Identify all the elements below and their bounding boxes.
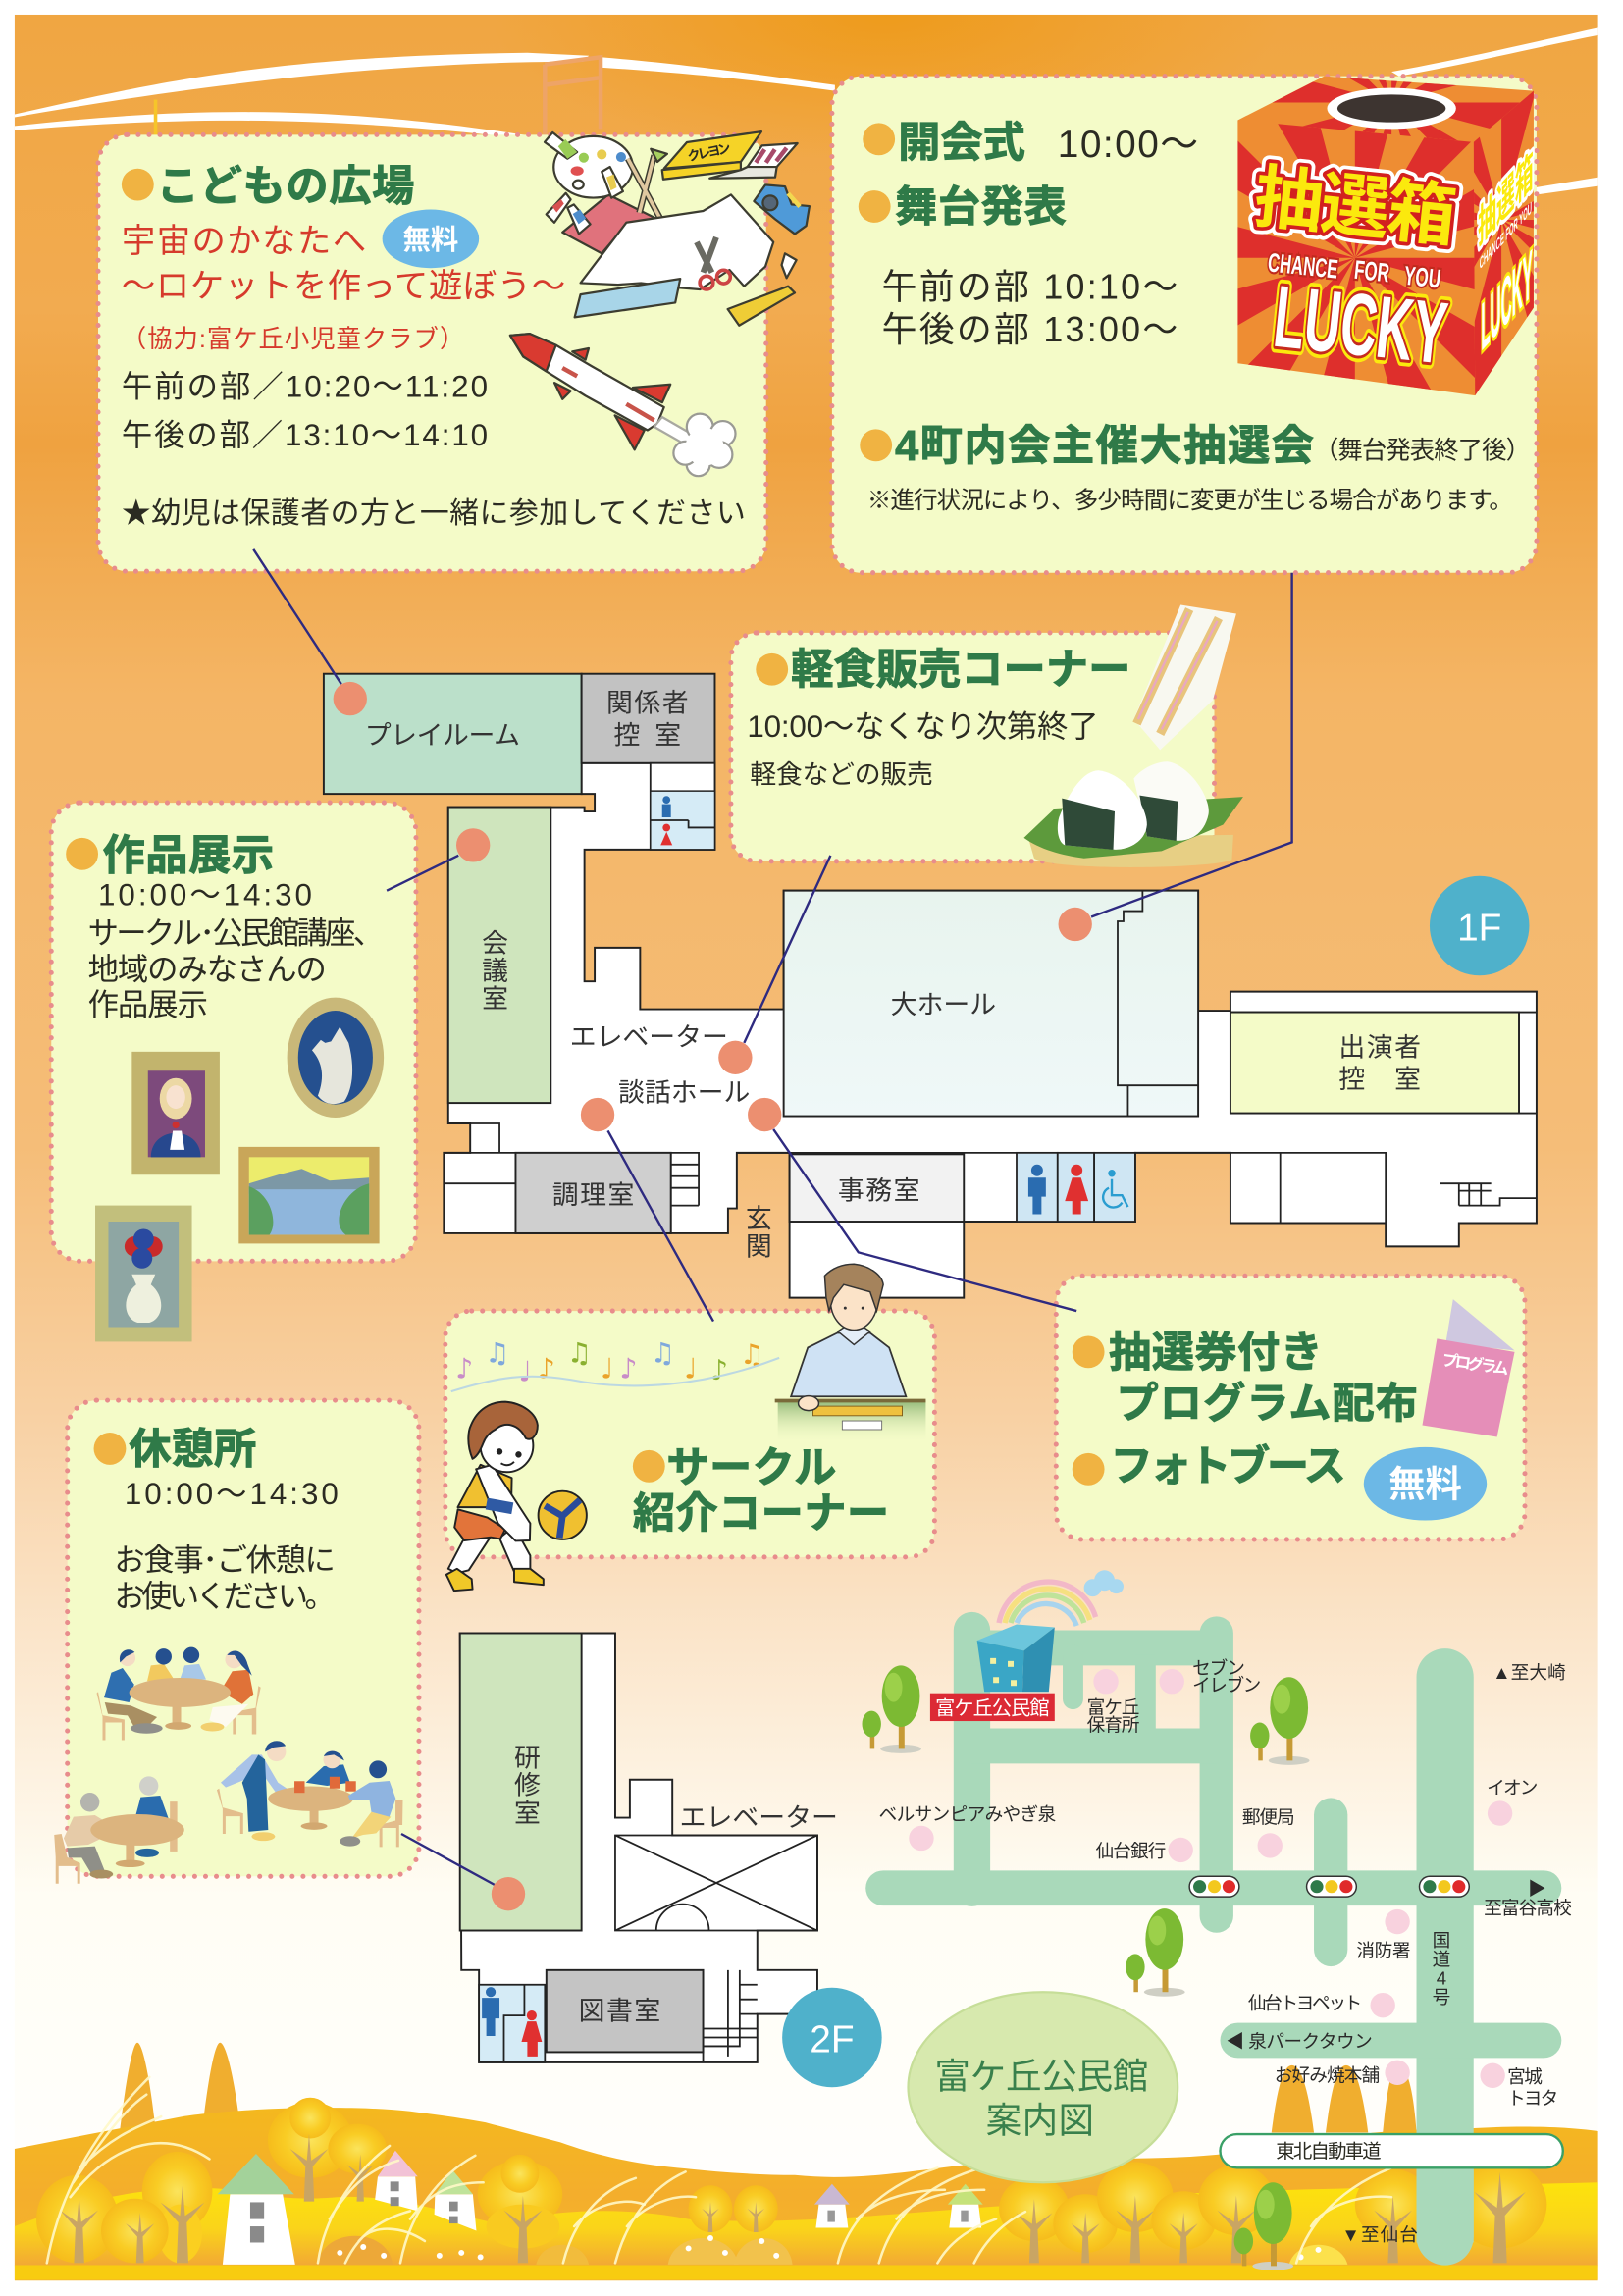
map labels: 仙台トヨペット — [1248, 1993, 1362, 2013]
panel: 抽選券付きプログラム配布・フォトブース — [1056, 1276, 1525, 1539]
music notes: ♩ — [518, 1356, 532, 1388]
map labels: 国 — [1433, 1930, 1450, 1951]
map labels: 4 — [1437, 1968, 1446, 1989]
panel: 開会式・舞台発表・抽選会 — [829, 74, 1539, 575]
room: 研修室: 室 — [514, 1799, 541, 1828]
lottery box: 抽選箱 — [1251, 157, 1460, 255]
room: 事務室 — [790, 1154, 964, 1222]
bullet — [863, 123, 895, 155]
restrooms 2F — [479, 1985, 545, 2062]
hours: 10:00～なくなり次第終了 — [747, 709, 1099, 744]
icon: craft supplies: クレヨン — [686, 140, 732, 164]
artwork: cat in oval frame — [288, 998, 384, 1118]
cooperation note: （協力:富ケ丘小児童クラブ） — [122, 326, 464, 353]
expressway: 東北自動車道: 東北自動車道 — [1276, 2141, 1382, 2163]
1F floor plan — [324, 674, 1537, 1298]
artwork: lake landscape — [238, 1147, 380, 1243]
badge: 無料 — [383, 210, 479, 268]
room: 図書室 — [547, 1970, 704, 2052]
room: 関係者控室: 控 室 — [613, 720, 681, 750]
bullet — [1073, 1453, 1105, 1486]
heading: 軽食販売コーナー: 軽食販売コーナー — [791, 647, 1130, 694]
description: 地域のみなさんの — [88, 953, 327, 987]
bullet — [122, 169, 154, 201]
pampas grass — [47, 2077, 1391, 2263]
restrooms main — [1017, 1153, 1135, 1222]
trees — [863, 1665, 1310, 2270]
illustration: people at table, top — [97, 1647, 261, 1740]
icon: program booklet — [1422, 1299, 1515, 1436]
icon: program booklet: プログラム — [1440, 1350, 1510, 1379]
lottery box: FOR — [1353, 255, 1390, 287]
room: 事務室: 事務室 — [838, 1176, 919, 1206]
room: 関係者控室: 関係者 — [606, 689, 689, 718]
heading: プログラム配布: プログラム配布 — [1116, 1381, 1418, 1428]
music notes: ♫ — [485, 1336, 510, 1369]
2F floor plan — [460, 1633, 882, 2087]
building outline 1F — [444, 763, 1537, 1298]
map labels: イオン — [1487, 1778, 1538, 1799]
afternoon stage time: 午後の部 13:00～ — [882, 310, 1178, 349]
map labels: 道 — [1433, 1949, 1450, 1969]
panel: 軽食販売コーナー — [731, 605, 1243, 867]
opening time: 10:00～ — [1058, 124, 1198, 166]
label: エレベーター: エレベーター — [570, 1022, 728, 1052]
badge: 1F — [1430, 876, 1529, 975]
music notes: ♪ — [710, 1354, 728, 1386]
room: 調理室: 調理室 — [552, 1180, 634, 1210]
room: プレイルーム — [324, 674, 582, 794]
label: エレベーター: エレベーター — [680, 1803, 838, 1833]
label: 玄関: 関 — [746, 1231, 772, 1261]
description: お使いください。 — [114, 1580, 336, 1614]
room: 図書室: 図書室 — [579, 1997, 660, 2026]
panel: サークル紹介コーナー — [445, 1264, 934, 1591]
music notes: ♪ — [538, 1353, 555, 1385]
corridor lines and small rooms — [444, 1123, 1537, 1233]
illustration: people at table, right — [217, 1741, 403, 1847]
heading: こどもの広場: こどもの広場 — [157, 164, 414, 211]
flower mounds — [318, 2235, 1347, 2265]
void with X — [615, 1835, 817, 1931]
artwork: vase of roses — [95, 1206, 192, 1341]
music notes: ♩ — [601, 1353, 613, 1385]
description: 作品展示 — [88, 988, 208, 1022]
heading: 抽選券付き: 抽選券付き — [1109, 1330, 1323, 1377]
map labels: ◀ 泉パークタウン — [1226, 2031, 1373, 2052]
room: 出演者控室: 控 室 — [1338, 1065, 1421, 1094]
bullet — [633, 1450, 665, 1483]
road segment below expressway — [1417, 2169, 1474, 2242]
badge: 無料 — [1364, 1447, 1487, 1521]
label: 富ケ丘公民館: 富ケ丘公民館 — [935, 1696, 1050, 1719]
landmark dots — [909, 1669, 1512, 2088]
icon: rainbow — [999, 1582, 1096, 1626]
map labels: トヨタ — [1507, 2088, 1558, 2109]
panel: こどもの広場 — [98, 131, 810, 571]
map labels: ベルサンピアみやぎ泉 — [879, 1804, 1057, 1825]
room: 出演者控室: 出演者 — [1338, 1032, 1421, 1062]
title oval: 富ケ丘公民館 案内図: 案内図 — [986, 2101, 1094, 2141]
heading: 休憩所: 休憩所 — [129, 1426, 256, 1473]
room: 出演者控室 — [1230, 1013, 1537, 1114]
bullet — [94, 1433, 126, 1465]
room: 調理室 — [515, 1153, 671, 1233]
landscape — [15, 2043, 1598, 2280]
room: 会議室: 会 — [482, 928, 508, 958]
music notes: ♩ — [684, 1353, 698, 1385]
map labels: ▶ — [1528, 1879, 1546, 1900]
room: 関係者控室 — [582, 674, 714, 763]
icon: sandwich — [1133, 605, 1236, 750]
room: 大ホール: 大ホール — [891, 990, 996, 1019]
badge: 2F: 2F — [810, 2018, 855, 2061]
description: お食事･ご休憩に — [114, 1542, 336, 1577]
room: 会議室 — [448, 808, 550, 1103]
map labels: お好み焼本舗 — [1275, 2064, 1380, 2085]
access map — [863, 1570, 1572, 2270]
illustration: man playing mahjong — [775, 1264, 925, 1441]
lottery box: LUCKY — [1481, 235, 1533, 367]
room: 大ホール — [784, 891, 1198, 1117]
map labels: 号 — [1433, 1987, 1450, 2008]
subtitle: ロケットを作って遊ぼう: ～ロケットを作って遊ぼう～ — [122, 268, 565, 305]
room: プレイルーム: プレイルーム — [365, 720, 520, 750]
room: 研修室 — [460, 1633, 582, 1931]
expressway: 東北自動車道 — [1220, 2134, 1563, 2167]
bullet — [66, 838, 98, 870]
heading: フォトブース: フォトブース — [1111, 1443, 1346, 1490]
badge: 無料: 無料 — [403, 225, 458, 256]
map labels: 仙台銀行 — [1096, 1841, 1166, 1861]
illustration: child with volleyball — [446, 1402, 587, 1591]
lottery box: YOU — [1402, 261, 1442, 294]
map labels: 郵便局 — [1242, 1807, 1295, 1828]
map labels: ▲至大崎 — [1492, 1662, 1566, 1683]
music notes: ♫ — [740, 1338, 764, 1371]
afternoon session time: 午後の部／13:10～14:10 — [122, 418, 488, 452]
subtitle: 宇宙のかなたへ: 宇宙のかなたへ — [122, 223, 366, 260]
description: 軽食などの販売 — [750, 760, 933, 790]
bullet — [756, 653, 788, 686]
map labels: 保育所 — [1087, 1714, 1139, 1735]
autumn trees — [36, 2098, 1546, 2263]
badge: 1F: 1F — [1457, 907, 1501, 949]
stairs 2F — [704, 1970, 758, 2062]
lottery box: LUCKY — [1270, 267, 1451, 383]
room: 会議室: 議 — [482, 957, 508, 986]
label: 談話ホール: 談話ホール — [618, 1078, 750, 1108]
map labels: 富ケ丘 — [1087, 1697, 1139, 1718]
location dots — [334, 682, 1092, 1910]
heading: 開会式: 開会式 — [898, 120, 1025, 167]
map labels: セブン — [1192, 1657, 1245, 1678]
lottery box: CHANCE — [1267, 247, 1339, 285]
icon: cloud — [1084, 1570, 1124, 1596]
music notes: ♪ — [455, 1353, 473, 1385]
schedule change note: ※進行状況により、多少時間に変更が生じる場合があります。 — [867, 487, 1513, 514]
hours: 10:00～14:30 — [125, 1477, 339, 1511]
lottery box: LUCKY — [1270, 267, 1451, 383]
houses — [218, 2151, 983, 2265]
panel: 作品展示 — [51, 803, 416, 1341]
room: 研修室: 修 — [514, 1771, 541, 1800]
morning session time: 午前の部／10:20～11:20 — [122, 370, 488, 404]
illustration: elderly people at table — [54, 1776, 184, 1884]
music notes: ♪ — [619, 1353, 638, 1385]
icon: community center building — [977, 1625, 1055, 1692]
badge: 2F — [782, 1988, 882, 2087]
bullet — [860, 429, 892, 461]
heading: サークル: サークル — [666, 1445, 836, 1492]
label: 玄関: 玄 — [746, 1204, 772, 1233]
bullet — [859, 190, 891, 223]
building outline 2F — [460, 1633, 817, 2062]
room: 会議室: 室 — [482, 984, 508, 1014]
lottery box — [1237, 77, 1535, 396]
bullet — [1073, 1335, 1105, 1368]
roads — [883, 1630, 1544, 2237]
lottery box: CHANCE FOR YOU — [1480, 198, 1532, 273]
morning stage time: 午前の部 10:10～ — [882, 268, 1178, 307]
panel: 休憩所 — [54, 1400, 419, 1884]
map labels: 宮城 — [1507, 2066, 1543, 2087]
map labels: ▼至仙台 — [1341, 2224, 1418, 2245]
music notes — [451, 1336, 779, 1391]
leader lines — [253, 549, 1292, 1885]
icon: rice balls on leaf — [1023, 761, 1243, 867]
music notes: ♫ — [651, 1336, 675, 1369]
icon: rocket — [510, 334, 736, 476]
room: 研修室: 研 — [514, 1743, 541, 1772]
heading: 作品展示: 作品展示 — [102, 833, 274, 880]
title oval: 富ケ丘公民館 案内図: 富ケ丘公民館 — [934, 2057, 1148, 2097]
heading: 4町内会主催大抽選会: 4町内会主催大抽選会 — [895, 423, 1314, 470]
description: サークル･公民館講座、 — [88, 915, 384, 950]
lottery box: 抽選箱 — [1251, 157, 1460, 255]
restrooms north — [651, 763, 714, 850]
title oval: 富ケ丘公民館 案内図 — [909, 1992, 1178, 2182]
note: after stage: （舞台発表終了後） — [1314, 437, 1531, 464]
heading: 紹介コーナー: 紹介コーナー — [633, 1490, 889, 1538]
map labels: 消防署 — [1356, 1940, 1411, 1960]
artwork: portrait — [131, 1052, 220, 1174]
heading: 舞台発表: 舞台発表 — [895, 183, 1067, 231]
map labels: イレブン — [1192, 1675, 1261, 1696]
map labels: 至富谷高校 — [1484, 1898, 1572, 1918]
hours: 10:00～14:30 — [98, 878, 312, 913]
traffic lights — [1189, 1876, 1469, 1897]
note: infants: ★幼児は保護者の方と一緒に参加してください — [122, 497, 746, 530]
lottery box: 抽選箱 — [1478, 144, 1534, 254]
music notes: ♫ — [567, 1336, 592, 1369]
badge: 無料: 無料 — [1388, 1464, 1462, 1505]
map labels — [879, 1657, 1572, 2245]
icon: craft supplies — [545, 131, 810, 326]
